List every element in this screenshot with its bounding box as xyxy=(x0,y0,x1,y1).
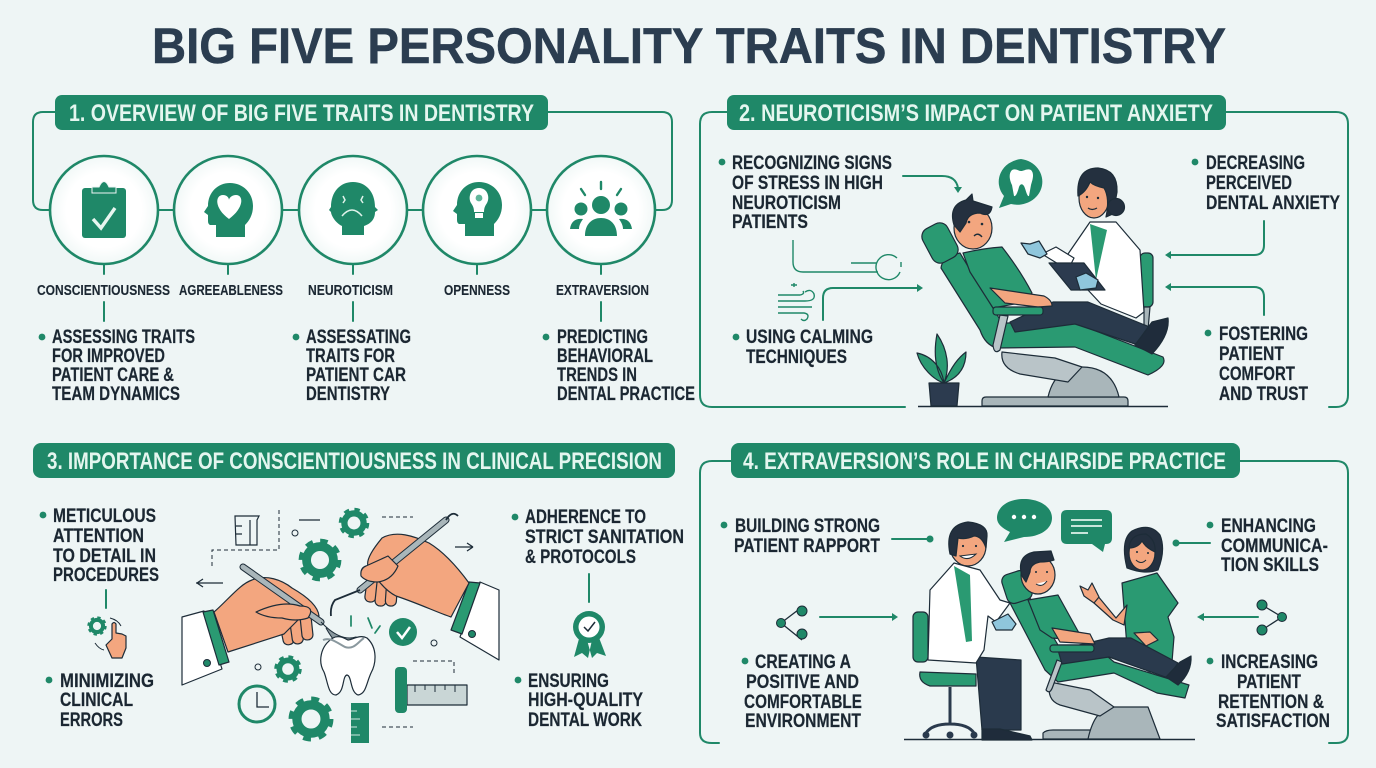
text block: increasing retention xyxy=(1207,652,1330,732)
trait labels: OPENNESS xyxy=(444,283,510,299)
icon: calming breath xyxy=(778,283,814,320)
heading: section 2 xyxy=(727,95,1226,130)
panel: neuroticism and patient anxiety xyxy=(700,95,1348,407)
text block: creating positive environment xyxy=(742,652,862,732)
text block: enhancing communication: ENHANCING xyxy=(1221,516,1316,537)
text block: ensuring high quality: DENTAL WORK xyxy=(528,710,642,731)
text block: assessing traits: TEAM DYNAMICS xyxy=(52,384,180,405)
panel: extraversion in chairside practice xyxy=(700,443,1348,743)
text block: adherence to sanitation xyxy=(512,507,684,568)
icon: potted plant xyxy=(917,334,966,406)
text block: using calming techniques: USING CALMING xyxy=(746,327,873,348)
connector: rapport xyxy=(892,536,934,542)
heading: section 4: 4. EXTRAVERSION’S ROLE IN CHAIRSIDE PRACTICE xyxy=(743,448,1226,475)
text block: fostering comfort and trust: PATIENT xyxy=(1219,344,1284,365)
text block: minimizing clinical errors: ERRORS xyxy=(60,710,123,731)
text block: meticulous attention xyxy=(40,506,159,586)
text block: assessing traits: FOR IMPROVED xyxy=(52,346,165,367)
text block: meticulous attention: PROCEDURES xyxy=(53,565,159,586)
text block: increasing retention: INCREASING xyxy=(1221,652,1318,673)
illustration: dentist, patient and assistant xyxy=(904,522,1195,740)
arrow: retention to chair xyxy=(1197,613,1258,621)
icon: quality badge xyxy=(573,611,606,658)
text block: recognizing signs of stress: PATIENTS xyxy=(732,212,808,233)
icon: tooth speech bubble xyxy=(999,159,1042,208)
trait labels: NEUROTICISM xyxy=(308,283,393,299)
connector: communication xyxy=(1172,540,1210,546)
heading: section 2: 2. NEUROTICISM’S IMPACT ON PATIENT ANXIETY xyxy=(739,100,1213,127)
text block: meticulous attention: METICULOUS xyxy=(53,506,156,527)
text block: creating positive environment: COMFORTABLE xyxy=(744,692,862,713)
text block: predicting trends xyxy=(543,327,695,405)
text block: minimizing clinical errors xyxy=(46,671,154,731)
heading: section 3 xyxy=(33,443,675,478)
panel: conscientiousness in clinical precision xyxy=(33,443,684,743)
arrow: stress signs to patient xyxy=(903,176,962,193)
heading: section 1 xyxy=(55,95,548,130)
text block: predicting trends: DENTAL PRACTICE xyxy=(557,384,695,405)
text block: predicting trends: BEHAVIORAL xyxy=(557,346,653,367)
icon: agreeableness head with heart xyxy=(174,156,282,264)
text block: creating positive environment: POSITIVE AND xyxy=(746,672,859,693)
icon: gear and pointing hand xyxy=(89,618,126,658)
icon: speech bubble with dots xyxy=(997,499,1052,542)
icon: stethoscope line xyxy=(793,240,901,280)
text block: assessing traits xyxy=(39,327,195,405)
icon: share nodes right xyxy=(1257,600,1286,635)
text block: enhancing communication: TION SKILLS xyxy=(1221,555,1319,576)
icon: neuroticism worried head xyxy=(299,156,407,264)
illustration: anxious patient and dentist xyxy=(918,168,1168,406)
text block: enhancing communication: COMMUNICA- xyxy=(1221,536,1328,557)
text block: predicting trends: PREDICTING xyxy=(557,327,648,348)
text block: minimizing clinical errors: MINIMIZING xyxy=(60,671,154,692)
text block: fostering comfort and trust: FOSTERING xyxy=(1219,324,1308,345)
text block: creating positive environment: CREATING A xyxy=(755,652,851,673)
icon: speech bubble with lines xyxy=(1061,510,1112,552)
trait labels xyxy=(37,283,649,299)
icon: share nodes left xyxy=(776,606,807,640)
text block: meticulous attention: TO DETAIL IN xyxy=(53,546,156,567)
text block: increasing retention: PATIENT xyxy=(1237,672,1301,693)
text block: adherence to sanitation: & PROTOCOLS xyxy=(525,547,636,568)
text block: assessating traits xyxy=(293,327,411,405)
title: BIG FIVE PERSONALITY TRAITS IN DENTISTRY xyxy=(152,18,1226,74)
text block: decreasing perceived anxiety: DECREASING xyxy=(1206,153,1305,174)
trait labels: AGREEABLENESS xyxy=(179,283,283,299)
heading: section 4 xyxy=(731,443,1240,478)
text block: assessing traits: ASSESSING TRAITS xyxy=(52,327,195,348)
panel: overview of big five traits xyxy=(33,95,695,405)
text block: assessating traits: DENTISTRY xyxy=(306,384,390,405)
text block: using calming techniques: TECHNIQUES xyxy=(746,347,847,368)
text block: increasing retention: RETENTION & xyxy=(1218,692,1324,713)
text block: building rapport: BUILDING STRONG xyxy=(735,516,880,537)
text block: increasing retention: SATISFACTION xyxy=(1216,711,1330,732)
text block: assessating traits: ASSESSATING xyxy=(306,327,411,348)
text block: recognizing signs of stress: NEUROTICISM xyxy=(732,193,841,214)
text block: assessing traits: PATIENT CARE & xyxy=(52,365,174,386)
text block: fostering comfort and trust xyxy=(1205,324,1308,405)
arrow: comfort to patient xyxy=(1165,283,1264,315)
icon: openness head with light bulb xyxy=(423,156,531,264)
text block: recognizing signs of stress: OF STRESS IN HIGH xyxy=(732,173,883,194)
arrow: environment to chair xyxy=(820,613,898,621)
trait labels: EXTRAVERSION xyxy=(556,283,649,299)
arrow: calming techniques to patient xyxy=(823,284,923,320)
text block: creating positive environment: ENVIRONMENT xyxy=(745,711,861,732)
text block: minimizing clinical errors: CLINICAL xyxy=(60,690,133,711)
icon: conscientiousness clipboard xyxy=(50,156,158,264)
trait labels: CONSCIENTIOUSNESS xyxy=(37,283,170,299)
text block: ensuring high quality: HIGH-QUALITY xyxy=(528,690,643,711)
text block: fostering comfort and trust: COMFORT xyxy=(1219,364,1295,385)
text block: building rapport xyxy=(721,516,880,557)
text block: enhancing communication xyxy=(1207,516,1328,576)
text block: fostering comfort and trust: AND TRUST xyxy=(1219,384,1308,405)
text block: predicting trends: TRENDS IN xyxy=(557,365,637,386)
text block: decreasing perceived anxiety xyxy=(1192,153,1340,214)
text block: decreasing perceived anxiety: PERCEIVED xyxy=(1206,173,1292,194)
text block: adherence to sanitation: STRICT SANITATION xyxy=(525,527,684,548)
text block: adherence to sanitation: ADHERENCE TO xyxy=(525,507,646,528)
heading: section 3: 3. IMPORTANCE OF CONSCIENTIOUSNESS IN CLINICAL PRECISION xyxy=(47,448,662,475)
arrow: anxiety to patient xyxy=(1165,221,1264,259)
text block: recognizing signs of stress xyxy=(719,153,892,233)
text block: assessating traits: TRAITS FOR xyxy=(306,346,395,367)
heading: section 1: 1. OVERVIEW OF BIG FIVE TRAITS IN DENTISTRY xyxy=(69,100,534,127)
text block: using calming techniques xyxy=(733,327,873,368)
text block: recognizing signs of stress: RECOGNIZING SIGNS xyxy=(732,153,892,174)
illustration: hands with dental instruments xyxy=(182,510,499,743)
text block: ensuring high quality xyxy=(515,671,643,731)
text block: ensuring high quality: ENSURING xyxy=(528,671,609,692)
icon: extraversion group xyxy=(547,156,655,264)
text block: assessating traits: PATIENT CAR xyxy=(306,365,406,386)
text block: decreasing perceived anxiety: DENTAL ANXIETY xyxy=(1206,193,1340,214)
text block: meticulous attention: ATTENTION xyxy=(53,526,144,547)
text block: building rapport: PATIENT RAPPORT xyxy=(734,536,880,557)
